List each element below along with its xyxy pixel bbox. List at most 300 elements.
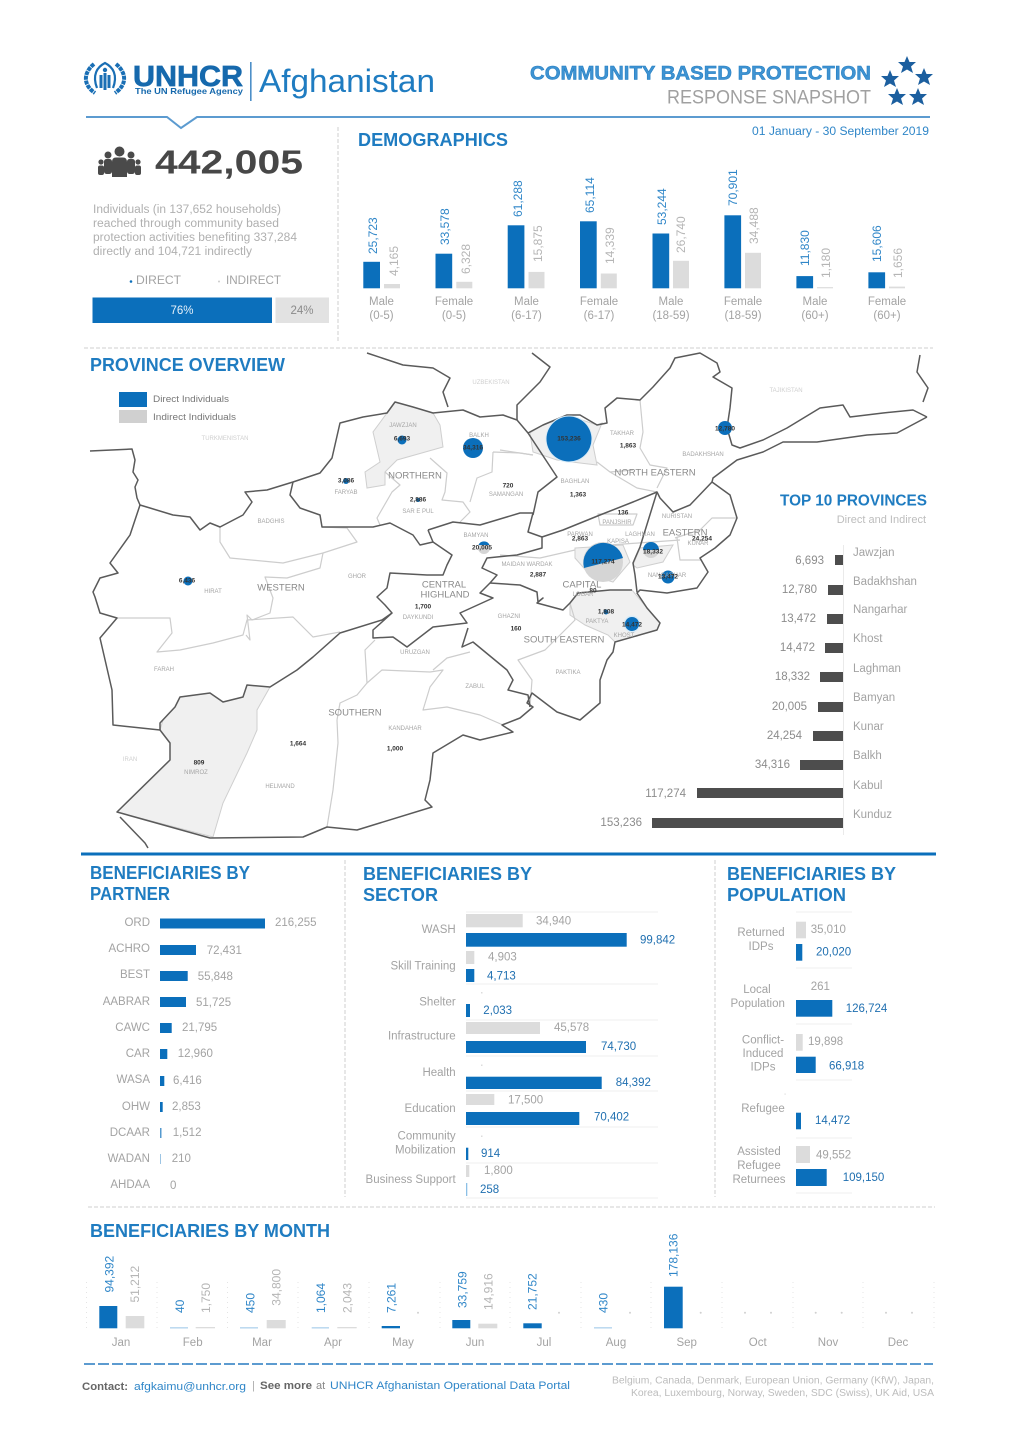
bar values: 1,180 bbox=[819, 248, 833, 278]
contact and portal links: at bbox=[316, 1380, 325, 1392]
month values: 7,261 bbox=[385, 1283, 399, 1313]
bubbles bbox=[184, 416, 732, 632]
description: Individuals (in 137,652 households) bbox=[93, 204, 281, 216]
province names: Laghman bbox=[853, 663, 901, 675]
month values: 51,212 bbox=[128, 1265, 142, 1302]
month values bbox=[102, 1233, 680, 1313]
icon: UNHCR emblem bbox=[86, 63, 124, 93]
bar values: 33,578 bbox=[438, 208, 452, 245]
partner names: WADAN bbox=[108, 1153, 150, 1165]
axis labels: (6-17) bbox=[584, 310, 615, 322]
heading: TOP 10 PROVINCES bbox=[780, 492, 927, 510]
province labels: DAYKUNDI bbox=[403, 615, 434, 621]
province labels bbox=[154, 423, 724, 790]
sector values: 17,500 bbox=[508, 1095, 543, 1107]
month labels: Sep bbox=[676, 1337, 697, 1349]
bar chart: months bbox=[99, 1287, 683, 1328]
bar values: 26,740 bbox=[674, 216, 688, 253]
partner values bbox=[170, 917, 317, 1192]
province labels: LOGAR bbox=[572, 592, 594, 598]
month values: 1,750 bbox=[199, 1283, 213, 1313]
bar chart: sectors bbox=[466, 914, 627, 1196]
heading: BENEFICIARIES BY MONTH bbox=[90, 1221, 330, 1241]
country name: Afghanistan bbox=[259, 63, 435, 99]
population values: 109,150 bbox=[843, 1172, 884, 1184]
header rule with notch bbox=[86, 117, 930, 128]
partner names: ORD bbox=[124, 917, 150, 929]
partner names: AABRAR bbox=[103, 996, 150, 1008]
province labels: GHAZNI bbox=[498, 614, 521, 620]
month labels bbox=[112, 1337, 908, 1349]
population group names bbox=[731, 927, 786, 1186]
values: 13,472 bbox=[781, 613, 816, 625]
sector names: Mobilization bbox=[395, 1145, 456, 1157]
province labels: BADAKHSHAN bbox=[682, 452, 724, 458]
province names: Badakhshan bbox=[853, 576, 917, 588]
subheading: Direct and Indirect bbox=[837, 514, 926, 526]
province labels: HELMAND bbox=[265, 784, 295, 790]
values: 6,693 bbox=[795, 555, 824, 567]
province labels: URUZGAN bbox=[400, 650, 430, 656]
axis labels: Female bbox=[724, 296, 762, 308]
bar values: 25,723 bbox=[366, 217, 380, 254]
sector names: Business Support bbox=[366, 1174, 457, 1186]
header: UNHCR logo and country bbox=[86, 61, 435, 101]
province values: 720 bbox=[503, 482, 514, 490]
population group names: Returned bbox=[737, 927, 785, 939]
region labels: WESTERN bbox=[257, 583, 305, 594]
legend: direct and indirect bbox=[130, 275, 281, 287]
country labels: UZBEKISTAN bbox=[472, 380, 510, 386]
province labels: PARWAN bbox=[567, 532, 593, 538]
region labels bbox=[257, 468, 708, 719]
contact and portal links: afgkaimu@unhcr.org bbox=[134, 1381, 246, 1393]
province values: 3,086 bbox=[338, 478, 355, 484]
bar values: 11,830 bbox=[798, 230, 812, 266]
month labels: May bbox=[392, 1337, 414, 1349]
population values: 261 bbox=[811, 981, 830, 993]
heading: POPULATION bbox=[727, 885, 846, 905]
partner names: CAR bbox=[126, 1048, 150, 1060]
province labels: BADGHIS bbox=[257, 519, 285, 525]
partner values: 55,848 bbox=[198, 971, 233, 983]
panel: demographics bbox=[358, 130, 906, 322]
panel: total reached bbox=[92, 144, 329, 323]
heading: PARTNER bbox=[90, 884, 170, 904]
legend: direct and indirect: DIRECT bbox=[136, 275, 181, 287]
province labels: KHOST bbox=[614, 633, 635, 639]
province values: 117,274 bbox=[591, 558, 615, 566]
province values: 809 bbox=[194, 760, 205, 766]
subtitle: RESPONSE SNAPSHOT bbox=[667, 88, 871, 108]
sector names: Education bbox=[405, 1103, 456, 1115]
population values bbox=[808, 924, 888, 1184]
axis labels: (0-5) bbox=[369, 310, 394, 322]
population values: 35,010 bbox=[811, 924, 846, 936]
province values: 14,472 bbox=[622, 622, 642, 628]
region labels: SOUTH EASTERN bbox=[524, 635, 605, 646]
province labels: LAGHMAN bbox=[625, 532, 655, 538]
sector values: 1,800 bbox=[484, 1165, 513, 1177]
heading: BENEFICIARIES BY bbox=[90, 863, 250, 883]
province values: 6,436 bbox=[179, 578, 196, 584]
total number: 442,005 bbox=[155, 144, 303, 180]
heading bbox=[727, 864, 896, 905]
population group names: Induced bbox=[743, 1048, 783, 1060]
map legend: Direct Individuals bbox=[153, 394, 230, 404]
region labels: CENTRAL bbox=[422, 580, 466, 591]
month labels: Jan bbox=[112, 1337, 130, 1349]
province names: Nangarhar bbox=[853, 604, 908, 616]
month labels: Jul bbox=[537, 1337, 551, 1349]
month values: 178,136 bbox=[666, 1233, 680, 1277]
sector values: 4,903 bbox=[488, 952, 517, 964]
partner names: ACHRO bbox=[108, 943, 150, 955]
donors: Belgium, Canada, Denmark, European Union, Germany (KfW), Japan, bbox=[612, 1376, 934, 1386]
province labels: JAWZJAN bbox=[389, 423, 417, 429]
province values: 2,886 bbox=[410, 496, 427, 504]
panel: beneficiaries by population bbox=[727, 864, 896, 1193]
province values: 12,780 bbox=[715, 426, 735, 432]
province labels: SAMANGAN bbox=[489, 492, 523, 498]
panel: province overview bbox=[90, 353, 928, 848]
population group names: Refugee bbox=[737, 1160, 781, 1172]
axis labels: Female bbox=[435, 296, 473, 308]
partner names: AHDAA bbox=[110, 1179, 150, 1191]
bar values: 6,328 bbox=[459, 244, 473, 274]
population group names: Population bbox=[731, 998, 785, 1010]
contact and portal links: Contact: bbox=[82, 1381, 128, 1393]
panel: beneficiaries by partner bbox=[90, 863, 317, 1192]
values: 153,236 bbox=[600, 817, 642, 829]
axis labels: Male bbox=[803, 296, 827, 308]
month values: 1,064 bbox=[314, 1283, 328, 1313]
province names: Jawzjan bbox=[853, 547, 895, 559]
bar values: 65,114 bbox=[583, 177, 597, 213]
heading bbox=[90, 863, 250, 904]
sector values: 258 bbox=[480, 1184, 499, 1196]
heading: BENEFICIARIES BY bbox=[363, 864, 532, 884]
month labels: Aug bbox=[606, 1337, 626, 1349]
header: report title bbox=[530, 64, 871, 108]
sector values: 2,033 bbox=[483, 1005, 512, 1017]
partner values: 21,795 bbox=[182, 1022, 217, 1034]
province values: 2,863 bbox=[572, 536, 589, 542]
map legend: Indirect Individuals bbox=[153, 412, 237, 422]
description: reached through community based bbox=[93, 218, 279, 230]
province names: Kabul bbox=[853, 780, 882, 792]
donors: Korea, Luxembourg, Norway, Sweden, SDC (Swiss), UK Aid, USA bbox=[631, 1388, 934, 1399]
bar values: 34,488 bbox=[747, 207, 761, 244]
donors bbox=[612, 1376, 934, 1399]
population group names: IDPs bbox=[751, 1062, 776, 1074]
heading bbox=[363, 864, 532, 905]
province values: 153,236 bbox=[557, 436, 581, 442]
partner names: OHW bbox=[122, 1101, 150, 1113]
province labels: HIRAT bbox=[204, 589, 222, 595]
province labels: NANGARHAR bbox=[648, 573, 687, 579]
province names: Bamyan bbox=[853, 692, 895, 704]
province labels: BALKH bbox=[469, 433, 489, 439]
axis labels: Male bbox=[514, 296, 539, 308]
population values: 19,898 bbox=[808, 1036, 843, 1048]
province labels: ZABUL bbox=[465, 684, 485, 690]
province names: Khost bbox=[853, 633, 883, 645]
section divider bbox=[81, 852, 936, 856]
bar values: 1,656 bbox=[891, 248, 905, 278]
icon: five stars bbox=[881, 56, 933, 105]
month values: 2,043 bbox=[340, 1283, 354, 1313]
province names bbox=[853, 547, 917, 821]
icon: people bbox=[98, 146, 141, 177]
partner values: 210 bbox=[172, 1153, 191, 1165]
sector values: 34,940 bbox=[536, 916, 571, 928]
population group names: IDPs bbox=[749, 941, 774, 953]
date range: 01 January - 30 September 2019 bbox=[752, 126, 929, 138]
contact and portal links: UNHCR Afghanistan Operational Data Portal bbox=[330, 1380, 570, 1392]
partner values: 2,853 bbox=[172, 1101, 201, 1113]
sector values: 45,578 bbox=[554, 1022, 589, 1034]
sector names: Skill Training bbox=[390, 961, 456, 973]
region labels: EASTERN bbox=[663, 528, 708, 539]
values: 14,472 bbox=[780, 642, 815, 654]
share bar bbox=[92, 298, 329, 323]
month values: 34,800 bbox=[270, 1269, 284, 1306]
province names: Balkh bbox=[853, 750, 882, 762]
population values: 14,472 bbox=[815, 1115, 850, 1127]
country labels: IRAN bbox=[123, 757, 137, 763]
axis labels bbox=[369, 296, 906, 322]
partner names: WASA bbox=[117, 1074, 150, 1086]
province values: 2,887 bbox=[530, 572, 547, 578]
population group names: Refugee bbox=[741, 1103, 785, 1115]
bar values: 61,288 bbox=[511, 180, 525, 217]
axis labels: (0-5) bbox=[442, 310, 466, 322]
heading: BENEFICIARIES BY bbox=[727, 864, 896, 884]
province values: 1,000 bbox=[387, 746, 404, 752]
month values: 14,916 bbox=[481, 1273, 495, 1310]
sector values: 914 bbox=[481, 1148, 501, 1160]
sector names: Infrastructure bbox=[388, 1031, 456, 1043]
population group names: Returnees bbox=[732, 1174, 786, 1186]
province values: 160 bbox=[511, 626, 522, 632]
partner values: 72,431 bbox=[207, 945, 242, 957]
month values: 21,752 bbox=[526, 1273, 540, 1310]
map: Afghanistan bbox=[90, 353, 928, 848]
population values: 49,552 bbox=[816, 1150, 851, 1162]
region labels: CAPITAL bbox=[563, 580, 601, 591]
province labels: SAR E PUL bbox=[402, 509, 434, 515]
population values: 20,020 bbox=[816, 946, 851, 958]
month values: 40 bbox=[173, 1299, 187, 1313]
month labels: Apr bbox=[324, 1337, 342, 1349]
contact and portal links bbox=[82, 1380, 570, 1393]
bar chart: demographics bbox=[363, 169, 906, 322]
province labels: NURISTAN bbox=[662, 514, 692, 520]
contact and portal links: | bbox=[252, 1380, 255, 1392]
sector names: Health bbox=[422, 1067, 456, 1079]
region labels: NORTH EASTERN bbox=[614, 468, 696, 479]
sector values: 99,842 bbox=[640, 935, 675, 947]
province values: 1,808 bbox=[598, 608, 615, 616]
country labels bbox=[123, 380, 803, 763]
sector values bbox=[480, 916, 675, 1196]
province values bbox=[179, 426, 735, 766]
values bbox=[600, 555, 824, 829]
province labels: FARAH bbox=[154, 667, 174, 673]
map legend bbox=[119, 392, 237, 423]
title: COMMUNITY BASED PROTECTION bbox=[530, 64, 871, 84]
province labels: BAMYAN bbox=[464, 533, 488, 539]
bar values: 53,244 bbox=[655, 188, 669, 225]
sector values: 4,713 bbox=[487, 971, 516, 983]
bar chart: top 10 bbox=[600, 545, 917, 835]
bar values: 15,606 bbox=[870, 225, 884, 262]
province names: Kunduz bbox=[853, 809, 892, 821]
axis labels: (6-17) bbox=[511, 310, 542, 322]
province labels: BAGHLAN bbox=[561, 479, 589, 485]
axis labels: Female bbox=[580, 296, 618, 308]
partner values: 6,416 bbox=[173, 1075, 202, 1087]
province values: 20,005 bbox=[472, 544, 492, 552]
logo tagline: The UN Refugee Agency bbox=[135, 86, 243, 96]
bar chart: partners bbox=[160, 918, 265, 1164]
values: 20,005 bbox=[772, 701, 807, 713]
province values: 34,316 bbox=[463, 444, 483, 452]
contact and portal links: See more bbox=[260, 1380, 312, 1392]
province labels: PAKTIKA bbox=[556, 670, 580, 676]
sector names bbox=[366, 924, 457, 1186]
province names: Kunar bbox=[853, 721, 884, 733]
heading: PROVINCE OVERVIEW bbox=[90, 355, 285, 375]
province boundaries bbox=[117, 400, 737, 827]
province labels: KANDAHAR bbox=[388, 726, 422, 732]
month labels: Mar bbox=[252, 1337, 272, 1349]
partner values: 51,725 bbox=[196, 997, 231, 1009]
province values: 1,863 bbox=[620, 442, 637, 450]
bar chart: population bbox=[784, 922, 832, 1186]
partner names: BEST bbox=[120, 969, 150, 981]
province labels: PANJSHIR bbox=[602, 520, 632, 526]
month labels: Oct bbox=[749, 1337, 767, 1349]
population values: 126,724 bbox=[846, 1003, 888, 1015]
bar values: 14,339 bbox=[603, 227, 617, 264]
legend: direct and indirect: INDIRECT bbox=[226, 275, 281, 287]
partner names: DCAAR bbox=[110, 1127, 150, 1139]
month values: 94,392 bbox=[102, 1255, 116, 1292]
values: 117,274 bbox=[645, 788, 687, 800]
description: directly and 104,721 indirectly bbox=[93, 246, 252, 258]
sector names: WASH bbox=[422, 924, 456, 936]
partner names bbox=[103, 917, 150, 1191]
bar values bbox=[366, 169, 905, 278]
month values: 430 bbox=[596, 1293, 610, 1313]
population group names: Local bbox=[743, 984, 771, 996]
province values: 18,332 bbox=[643, 548, 663, 556]
province labels: PAKTYA bbox=[586, 619, 608, 625]
bar values: 4,165 bbox=[387, 246, 401, 276]
logo divider bbox=[250, 62, 252, 101]
province values: 1,700 bbox=[415, 604, 432, 610]
month labels: Dec bbox=[888, 1337, 908, 1349]
values: 12,780 bbox=[782, 584, 817, 596]
country labels: TURKMENISTAN bbox=[202, 436, 248, 442]
axis labels: Female bbox=[868, 296, 906, 308]
logo wordmark: UNHCR bbox=[133, 61, 243, 93]
province labels: NIMROZ bbox=[184, 770, 208, 776]
partner values: 216,255 bbox=[275, 917, 317, 929]
panel: beneficiaries by month bbox=[86, 1221, 934, 1349]
empty-value markers bbox=[417, 1312, 913, 1314]
share bar: 76% bbox=[170, 305, 194, 317]
values: 24,254 bbox=[767, 730, 803, 742]
footer bbox=[82, 1376, 934, 1399]
region and country borders bbox=[90, 353, 928, 848]
province values: 80 bbox=[589, 588, 597, 594]
sector values: 70,402 bbox=[594, 1112, 629, 1124]
region labels: SOUTHERN bbox=[328, 708, 382, 719]
region labels: NORTHERN bbox=[388, 471, 442, 482]
province labels: MAIDAN WARDAK bbox=[501, 562, 553, 568]
axis labels: Male bbox=[369, 296, 394, 308]
province values: 1,363 bbox=[570, 492, 587, 498]
bar values: 15,875 bbox=[531, 225, 545, 262]
axis labels: (60+) bbox=[801, 310, 829, 322]
sector values: 74,730 bbox=[601, 1041, 636, 1053]
description bbox=[93, 204, 298, 258]
partner values: 0 bbox=[170, 1180, 176, 1192]
sector names: Shelter bbox=[419, 997, 456, 1009]
population values: 66,918 bbox=[829, 1061, 864, 1073]
partner values: 1,512 bbox=[173, 1127, 201, 1139]
axis labels: (18-59) bbox=[724, 310, 762, 322]
bar values: 70,901 bbox=[726, 169, 740, 206]
population group names: Assisted bbox=[737, 1146, 781, 1158]
month labels: Feb bbox=[183, 1337, 203, 1349]
values: 34,316 bbox=[755, 759, 790, 771]
axis labels: Male bbox=[659, 296, 683, 308]
values: 18,332 bbox=[775, 671, 810, 683]
province values: 136 bbox=[618, 510, 629, 516]
panel: top 10 provinces bbox=[600, 492, 927, 835]
partner names: CAWC bbox=[115, 1022, 150, 1034]
population group names: Conflict- bbox=[742, 1035, 784, 1047]
month values: 33,759 bbox=[456, 1271, 470, 1308]
province labels: FARYAB bbox=[334, 490, 358, 496]
province values: 1,664 bbox=[290, 740, 307, 748]
month values: 450 bbox=[244, 1293, 258, 1313]
province labels: KUNAR bbox=[687, 541, 709, 547]
province values: 24,254 bbox=[692, 536, 712, 542]
heading: SECTOR bbox=[363, 885, 438, 905]
sector values: 84,392 bbox=[616, 1077, 651, 1089]
province values: 13,472 bbox=[658, 574, 678, 580]
region labels: HIGHLAND bbox=[420, 590, 470, 601]
country labels: TAJIKISTAN bbox=[769, 388, 803, 394]
heading: DEMOGRAPHICS bbox=[358, 130, 508, 150]
month labels: Jun bbox=[466, 1337, 484, 1349]
sector names: Community bbox=[398, 1131, 456, 1143]
partner values: 12,960 bbox=[178, 1048, 213, 1060]
month labels: Nov bbox=[818, 1337, 838, 1349]
shaded provinces bbox=[117, 402, 673, 837]
description: protection activities benefiting 337,284 bbox=[93, 232, 298, 244]
panel: beneficiaries by sector bbox=[363, 864, 675, 1198]
province labels: KAPISA bbox=[607, 539, 629, 545]
province labels: TAKHAR bbox=[610, 431, 635, 437]
axis labels: (60+) bbox=[873, 310, 901, 322]
share bar: 24% bbox=[290, 305, 314, 317]
